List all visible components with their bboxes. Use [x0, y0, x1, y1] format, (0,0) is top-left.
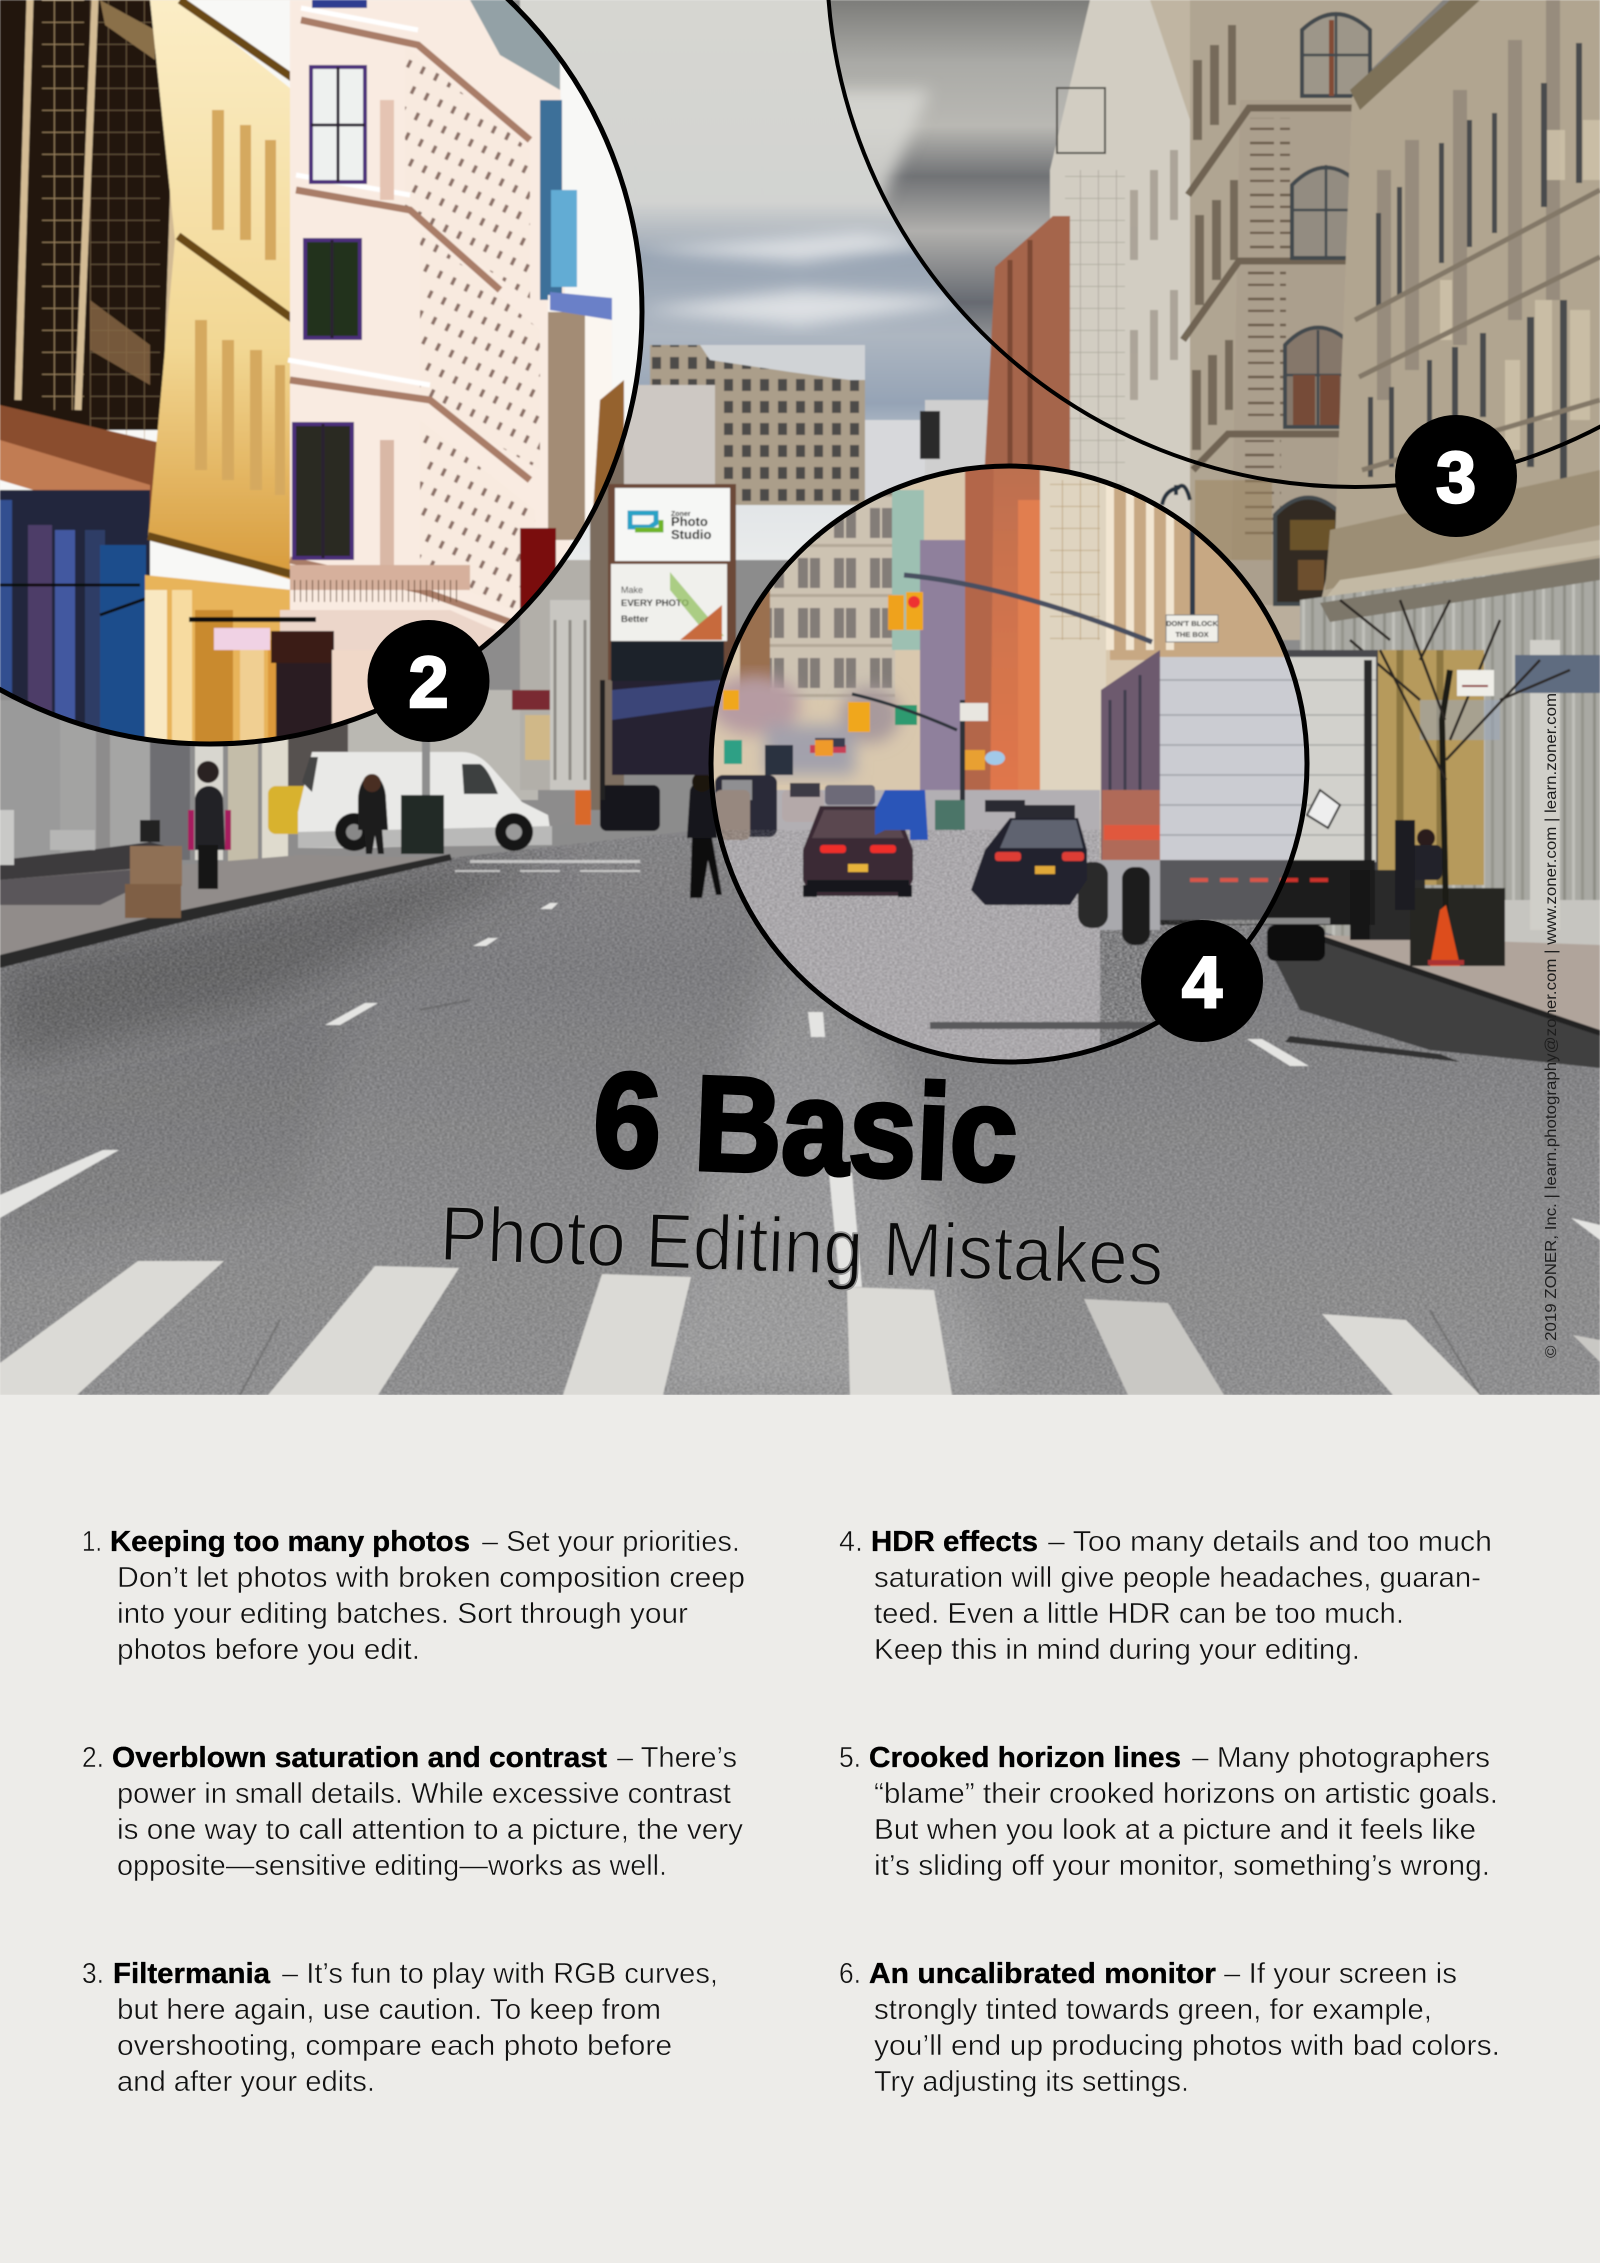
badge 3: 3	[1436, 438, 1476, 518]
badge 2: 2	[408, 643, 449, 723]
item 4: saturation will give people headaches, guaran-	[874, 1562, 1481, 1594]
ground floor	[1300, 560, 1600, 950]
small arches along the receding wall	[1192, 25, 1238, 450]
item 5: But when you look at a picture and it feels like	[874, 1814, 1476, 1846]
vertical credit line: © 2019 ZONER, Inc. | learn.photography@zoner.com | www.zoner.com | learn.zoner.com	[1543, 693, 1560, 1358]
item 2: 2.	[82, 1742, 104, 1774]
item 6: – If your screen is	[1224, 1958, 1457, 1990]
item 2: opposite—sensitive editing—works as well.	[117, 1850, 667, 1882]
item 6: 6.	[839, 1958, 861, 1990]
far right building	[1320, 0, 1600, 605]
billboard: EVERY PHOTO	[621, 598, 689, 609]
sky	[519, 0, 992, 561]
billboard: Better	[621, 614, 649, 625]
street photo panel	[0, 0, 1600, 1395]
billboard: Make	[621, 585, 643, 595]
item 3: Filtermania	[113, 1958, 271, 1990]
no-block sign: THE BOX	[1175, 630, 1209, 639]
fire escape	[1065, 170, 1125, 510]
road	[0, 840, 1403, 1072]
corner quoins	[1250, 118, 1290, 253]
item 5: “blame” their crooked horizons on artistic goals.	[874, 1778, 1498, 1810]
left base grey buildings	[0, 442, 625, 881]
lamp post	[1162, 485, 1190, 505]
far traffic	[710, 675, 985, 840]
item 1: Keeping too many photos	[110, 1526, 470, 1558]
item 4: – Too many details and too much	[1048, 1526, 1492, 1558]
distant skyline buildings	[623, 344, 989, 506]
badge 3	[1395, 415, 1517, 537]
right pavement	[1270, 935, 1600, 1068]
item 4	[839, 1526, 1492, 1666]
tone overlay on stonework	[1190, 0, 1600, 605]
crosswalk	[0, 1261, 1600, 1395]
planters and tree	[1340, 600, 1570, 966]
circle 2 interior: over-saturated buildings	[0, 0, 680, 761]
no-block sign: DON'T BLOCK	[1166, 619, 1218, 628]
item 4: 4.	[839, 1526, 863, 1558]
item 5: Crooked horizon lines	[869, 1742, 1181, 1774]
text column left	[82, 1526, 745, 2098]
billboard: Photo	[671, 514, 708, 529]
title	[438, 1045, 1165, 1302]
item 3: overshooting, compare each photo before	[117, 2030, 672, 2062]
right buildings	[1040, 0, 1600, 950]
signal arms and lights	[852, 500, 1195, 830]
item 3: 3.	[82, 1958, 104, 1990]
item 2: is one way to call attention to a picture, the very	[117, 1814, 743, 1846]
item 1: – Set your priorities.	[482, 1526, 740, 1558]
billboard: Zoner	[671, 511, 691, 518]
item 1: into your editing batches. Sort through your	[117, 1598, 688, 1630]
item 1: photos before you edit.	[117, 1634, 420, 1666]
item 1	[82, 1526, 745, 1666]
item 6: Try adjusting its settings.	[874, 2066, 1189, 2098]
pedestrians and props	[125, 761, 722, 918]
item 5	[839, 1742, 1498, 1882]
subtitle: Photo Editing Mistakes	[438, 1189, 1165, 1302]
title: 6 Basic	[591, 1045, 1020, 1210]
lane markings	[0, 860, 1600, 1287]
item 5: – Many photographers	[1192, 1742, 1490, 1774]
no-block sign	[1166, 615, 1218, 642]
item 5: it’s sliding off your monitor, something’s wrong.	[874, 1850, 1490, 1882]
tall arched windows	[1275, 14, 1370, 604]
item 6: strongly tinted towards green, for example,	[874, 1994, 1432, 2026]
item 1: Don’t let photos with broken composition creep	[117, 1562, 745, 1594]
item 4: HDR effects	[871, 1526, 1038, 1558]
circle outlines	[0, 0, 1600, 1062]
text column right	[839, 1526, 1500, 2098]
brick building	[984, 215, 1071, 470]
badge 4: 4	[1182, 943, 1222, 1023]
item 3: but here again, use caution. To keep from	[117, 1994, 661, 2026]
left sidewalk	[0, 854, 452, 968]
item 2: power in small details. While excessive contrast	[117, 1778, 731, 1810]
red car	[803, 806, 913, 897]
item 4: teed. Even a little HDR can be too much.	[874, 1598, 1404, 1630]
item 6: you’ll end up producing photos with bad colors.	[874, 2030, 1500, 2062]
item 2: – There’s	[617, 1742, 737, 1774]
item 2: Overblown saturation and contrast	[112, 1742, 607, 1774]
badge 4	[1141, 920, 1263, 1042]
circle 4 interior: HDR street	[700, 340, 1377, 1070]
road light and dark zones	[0, 830, 1600, 1395]
parked van	[268, 715, 552, 854]
truck	[1160, 649, 1416, 962]
item 4: Keep this in mind during your editing.	[874, 1634, 1360, 1666]
sky inside circle 3, darkened	[830, 0, 1090, 340]
item 1: 1.	[82, 1526, 102, 1558]
item 3: – It’s fun to play with RGB curves,	[282, 1958, 718, 1990]
dark car	[971, 818, 1087, 905]
billboard	[600, 484, 736, 800]
item 6: An uncalibrated monitor	[869, 1958, 1216, 1990]
billboard: Studio	[671, 527, 711, 542]
item 2	[82, 1742, 743, 1882]
item 5: 5.	[839, 1742, 861, 1774]
badge 2	[368, 620, 490, 742]
blue car	[875, 790, 928, 840]
item 3: and after your edits.	[117, 2066, 375, 2098]
item 6	[839, 1958, 1500, 2098]
item 3	[82, 1958, 718, 2098]
